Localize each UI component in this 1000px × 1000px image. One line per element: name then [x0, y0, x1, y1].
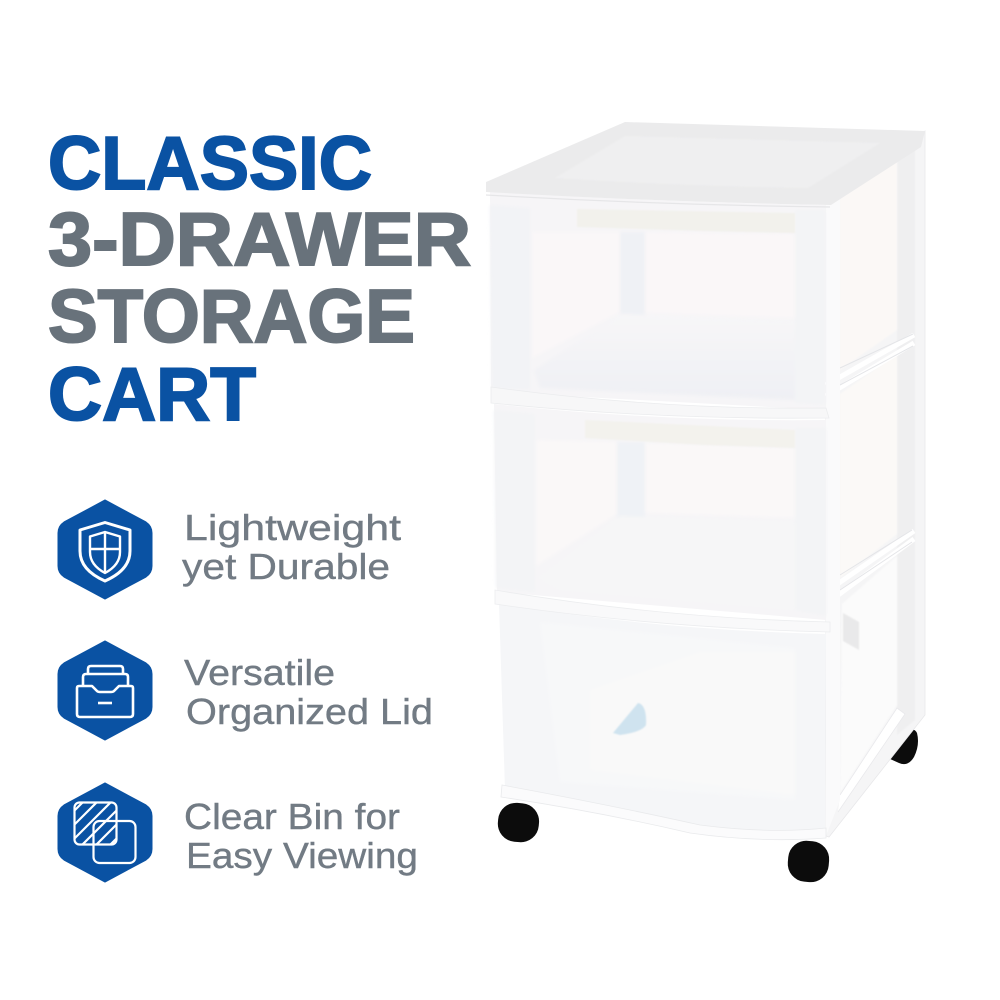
title: 3-DRAWER	[48, 197, 471, 281]
title: STORAGE	[48, 274, 415, 358]
feature text: lightweight yet durable: Lightweight	[184, 507, 401, 548]
drawer 3 interior	[540, 622, 795, 800]
side tab	[843, 613, 859, 650]
title: CLASSIC	[48, 121, 372, 205]
title: CART	[48, 352, 256, 436]
infographic canvas	[48, 122, 926, 882]
lid	[486, 122, 925, 205]
drawer 1 handle band	[577, 209, 795, 233]
side rails	[826, 335, 914, 604]
side panels	[840, 160, 897, 793]
icon: file drawer in hexagon	[58, 641, 152, 740]
title	[48, 121, 471, 436]
feature text: clear bin for easy viewing: Clear Bin for	[184, 796, 400, 837]
back caster	[886, 729, 918, 764]
drawer 2 handle band	[585, 420, 795, 448]
drawer 2 front	[494, 404, 826, 620]
front-left caster	[496, 801, 541, 844]
lid inset	[555, 136, 880, 188]
icon: overlapping clear panes in hexagon	[58, 783, 152, 882]
drawer 1 interior	[490, 205, 825, 405]
feature text: clear bin for easy viewing	[184, 796, 418, 876]
feature text: versatile organized lid: Organized Lid	[186, 691, 433, 732]
product: 3-drawer cart	[486, 122, 925, 884]
drawer 3 rim bottom	[501, 785, 826, 840]
feature text: versatile organized lid: Versatile	[184, 652, 335, 693]
drawer 1 rim	[491, 387, 829, 418]
drawer 3 front	[499, 604, 826, 836]
drawer 2 interior	[494, 410, 826, 616]
feature text: lightweight yet durable	[182, 507, 401, 587]
front-right caster	[786, 839, 831, 884]
feature text: clear bin for easy viewing: Easy Viewing	[186, 835, 418, 876]
icon: shield in hexagon	[58, 500, 152, 599]
drawer 2 rim	[495, 590, 830, 632]
feature text: versatile organized lid	[184, 652, 433, 732]
blue reflection	[613, 703, 646, 735]
side frame stripe	[897, 145, 915, 735]
drawer 1 front	[490, 192, 825, 410]
feature text: lightweight yet durable: yet Durable	[182, 546, 390, 587]
side frame	[826, 131, 925, 837]
